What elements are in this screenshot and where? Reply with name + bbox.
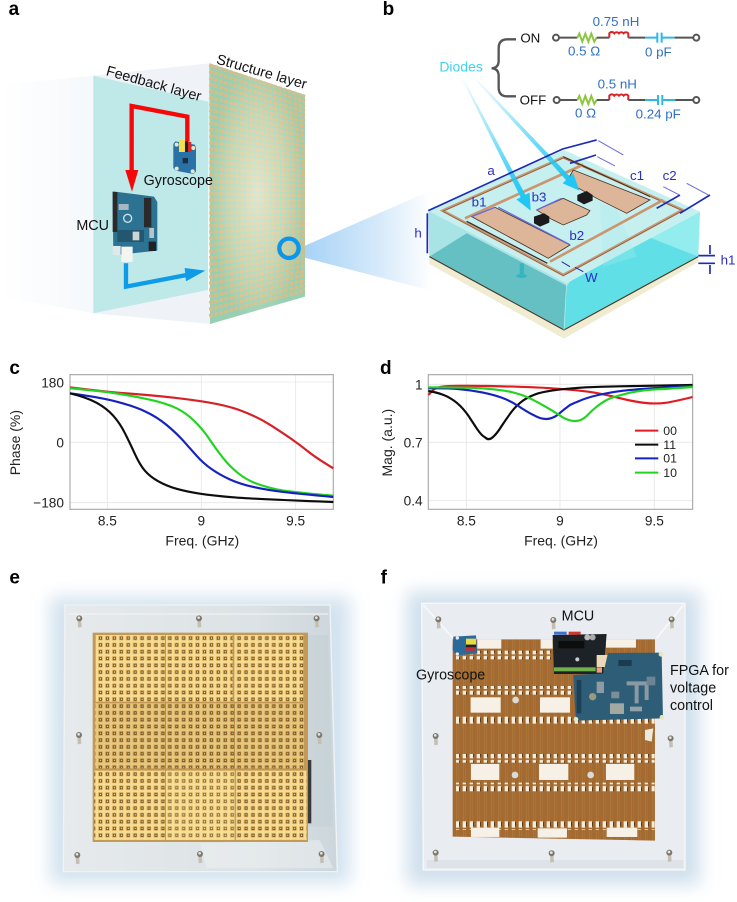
panel a: system schematic (0, 0, 309, 324)
copper patches (472, 170, 650, 258)
via (516, 263, 527, 278)
dimension lines (427, 140, 715, 274)
label: feedback layer: Feedback layer (104, 63, 203, 105)
y axis title: Phase (%) (7, 410, 23, 475)
glass plate (422, 603, 685, 870)
x axis ticks: 9 (556, 514, 564, 529)
x axis ticks: 9.5 (286, 514, 306, 529)
curve 11 black (428, 385, 693, 439)
circuit: OFF state (554, 94, 699, 105)
label: FPGA for voltage control (670, 663, 729, 714)
label: structure layer: Structure layer (215, 52, 309, 93)
legend: 01 (663, 452, 677, 466)
screws (74, 615, 325, 864)
photo glow (407, 592, 700, 885)
y axis ticks: −180 (33, 496, 64, 511)
label: MCU: MCU (76, 218, 109, 234)
y axis title: Mag. (a.u.) (379, 409, 395, 476)
x axis ticks (457, 514, 664, 529)
dimension labels (414, 163, 735, 285)
label: OFF state: OFF (520, 93, 546, 108)
dimension labels: b3 (532, 190, 546, 205)
legend: 11 (663, 438, 676, 452)
x axis title: Freq. (GHz) (524, 533, 598, 549)
brace linking diode states (492, 39, 516, 96)
arrows: diodes pointers (463, 79, 579, 211)
plot frame and grid (428, 375, 693, 509)
control strip at right edge (306, 760, 311, 823)
icon: gyroscope module (173, 140, 196, 174)
x axis ticks: 9.5 (645, 514, 664, 529)
dimension labels: h1 (721, 253, 735, 268)
panel c: phase chart (7, 358, 333, 549)
panel b: unit cell (383, 0, 735, 339)
label: diodes: Diodes (439, 59, 483, 75)
panel e: photo of front (9, 567, 350, 883)
dimension labels: a (487, 163, 495, 178)
curve 01 blue (428, 386, 693, 419)
control circuit board (453, 639, 655, 841)
metal rings (443, 157, 683, 276)
curve 11 black (70, 393, 333, 502)
value: 0.5 nH: 0.5 nH (598, 76, 637, 91)
x axis ticks: 8.5 (457, 514, 476, 529)
y axis ticks (33, 375, 64, 511)
icon: gyroscope module (453, 635, 477, 656)
panel label f: f (381, 567, 388, 588)
curve 01 blue (70, 393, 333, 497)
icon: diodes (534, 191, 593, 227)
x axis ticks: 9 (198, 514, 205, 529)
value: 0.5 ohm: 0.5 Ω (568, 44, 600, 59)
dimension labels: c1 (630, 168, 644, 183)
x axis ticks (98, 514, 306, 529)
blue arrow: MCU to structure layer (126, 263, 205, 287)
icon: MCU board (553, 632, 609, 674)
screws (433, 616, 675, 863)
label: FPGA for voltage control: control (670, 698, 713, 714)
label: MCU: MCU (562, 608, 594, 624)
glass plate (63, 605, 337, 872)
curve 10 green (70, 388, 333, 496)
legend: 10 (663, 466, 677, 480)
beam from unit cell to zoomed view (302, 190, 432, 291)
panel label d: d (380, 358, 392, 379)
curve 00 red (428, 386, 693, 404)
value: 0.75 nH: 0.75 nH (593, 14, 639, 29)
feedback layer sheet (93, 76, 209, 313)
legend: 00 (663, 424, 677, 438)
dimension labels: W (585, 270, 598, 285)
label: FPGA for voltage control: FPGA for (670, 663, 729, 679)
icon: unit cell ring marker (279, 239, 299, 258)
legend (635, 424, 677, 480)
circuit: ON state (553, 32, 699, 43)
photo glow (50, 597, 350, 883)
value: 0 pF: 0 pF (645, 45, 672, 60)
dimension labels: c2 (663, 168, 677, 183)
y axis ticks (404, 377, 423, 508)
curve 00 red (70, 387, 333, 468)
gold metasurface array (93, 633, 308, 842)
y axis ticks: 0.7 (404, 435, 423, 450)
dimension labels: b2 (569, 228, 584, 243)
value: 0.24 pF: 0.24 pF (636, 107, 681, 122)
panel f: photo of back (381, 567, 729, 885)
background fade behind layers (0, 63, 210, 324)
dimension labels: b1 (472, 195, 486, 210)
panel d: magnitude chart (379, 358, 693, 549)
red arrow: gyroscope to MCU (125, 106, 187, 192)
panel label c: c (9, 358, 20, 379)
y axis ticks: 180 (41, 375, 64, 390)
y axis ticks: 0 (56, 435, 64, 450)
curve 10 green (428, 387, 693, 421)
label: ON state: ON (520, 30, 540, 45)
unit cell box (428, 150, 700, 339)
label: gyroscope: Gyroscope (144, 173, 213, 189)
panel label e: e (9, 567, 20, 588)
plot frame and grid (70, 375, 333, 509)
x axis ticks: 8.5 (98, 514, 117, 529)
x axis title: Freq. (GHz) (165, 533, 239, 549)
label: FPGA for voltage control: voltage (670, 681, 716, 697)
value: 0 ohm: 0 Ω (575, 105, 596, 120)
label: gyroscope: Gyroscope (416, 668, 485, 684)
structure layer sheet (209, 63, 305, 324)
y axis ticks: 0.4 (404, 493, 423, 508)
icon: MCU board (113, 191, 157, 262)
dimension labels: h (414, 226, 422, 241)
y axis ticks: 1 (415, 377, 423, 392)
icon: FPGA board (573, 652, 664, 722)
